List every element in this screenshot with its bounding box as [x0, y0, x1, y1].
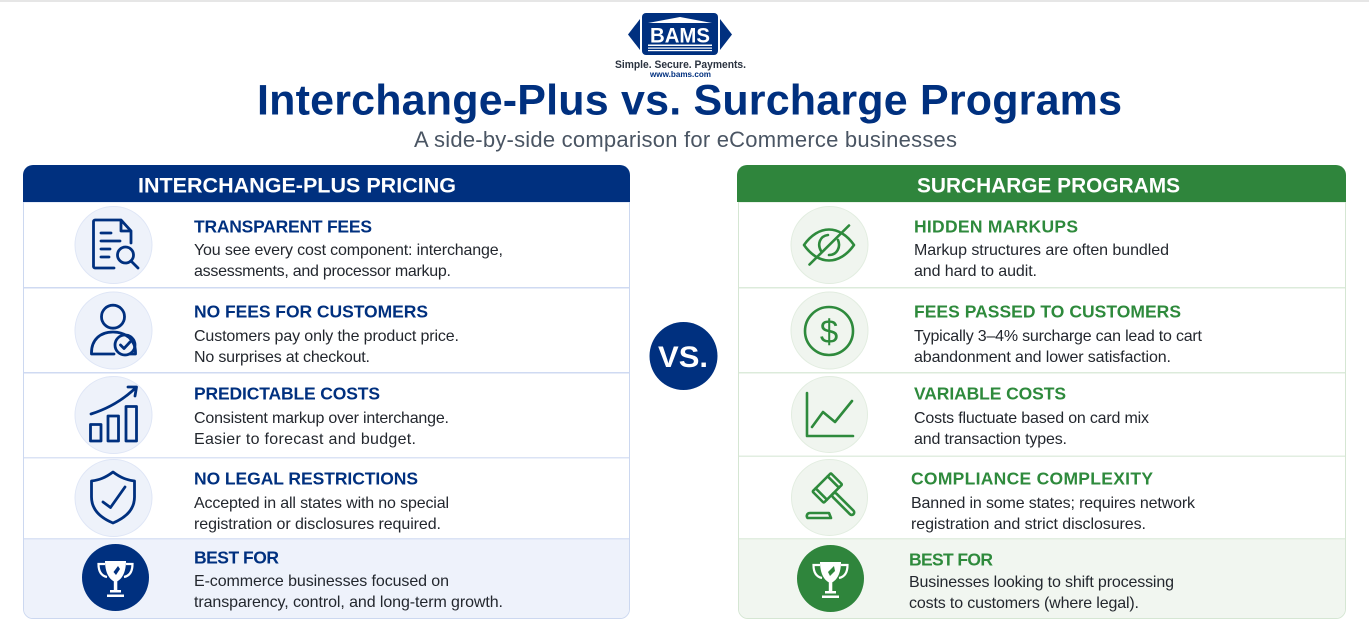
- icon: gavel: [792, 460, 868, 536]
- icon: trophy: [82, 544, 149, 611]
- text: fees passed to customers: [914, 328, 1203, 366]
- panel header: surcharge programs: [737, 165, 1346, 202]
- badge: VS: [650, 322, 718, 390]
- row: hidden markups: [791, 206, 1169, 284]
- heading: predictable costs: PREDICTABLE COSTS: [194, 384, 380, 404]
- panel header: interchange-plus pricing: INTERCHANGE-PLUS PRICING: [138, 174, 456, 198]
- row: best for: [82, 544, 503, 611]
- icon: dollar coin: $: [820, 313, 838, 350]
- row: transparent fees: [75, 206, 503, 284]
- heading: hidden markups: HIDDEN MARKUPS: [914, 216, 1078, 236]
- icon: customer with check: [75, 292, 152, 369]
- heading: no fees for customers: NO FEES FOR CUSTOMERS: [194, 302, 428, 322]
- text: no legal restrictions: [194, 495, 449, 533]
- logo: BAMS: Simple. Secure. Payments.: [615, 59, 746, 71]
- text: no fees for customers: Customers pay only the product price.: [194, 328, 459, 345]
- row: no fees for customers: [75, 292, 459, 369]
- text: transparent fees: [194, 242, 503, 280]
- icon: shield with check: [75, 460, 152, 536]
- text: no legal restrictions: registration or disclosures required.: [194, 516, 441, 533]
- heading: best for: BEST FOR: [909, 550, 993, 570]
- text: fees passed to customers: Typically 3–4% surcharge can lead to cart: [914, 328, 1203, 345]
- subtitle: A side-by-side comparison for eCommerce businesses: [414, 127, 957, 152]
- text: hidden markups: and hard to audit.: [914, 263, 1037, 280]
- badge: VS: VS.: [658, 341, 708, 374]
- heading: variable costs: VARIABLE COSTS: [914, 384, 1066, 404]
- text: compliance complexity: Banned in some states; requires network: [911, 495, 1196, 512]
- heading: no legal restrictions: NO LEGAL RESTRICTIONS: [194, 468, 418, 488]
- text: best for: transparency, control, and long-term growth.: [194, 594, 503, 611]
- text: predictable costs: [194, 410, 449, 448]
- icon: document with magnifier: [75, 206, 152, 284]
- text: best for: [909, 574, 1174, 612]
- text: best for: costs to customers (where legal).: [909, 595, 1139, 612]
- text: no legal restrictions: Accepted in all states with no special: [194, 495, 449, 512]
- row: fees passed to customers: [791, 292, 1203, 369]
- title: Interchange-Plus vs. Surcharge Programs: [257, 76, 1122, 124]
- text: variable costs: Costs fluctuate based on card mix: [914, 410, 1149, 427]
- row: predictable costs: [75, 376, 449, 454]
- text: compliance complexity: registration and strict disclosures.: [911, 516, 1146, 533]
- icon: growth chart: [75, 376, 152, 454]
- logo: BAMS: BAMS: [650, 24, 710, 48]
- text: fees passed to customers: abandonment and lower satisfaction.: [914, 349, 1171, 366]
- panel header: interchange-plus pricing: [23, 165, 630, 202]
- row: variable costs: [792, 376, 1149, 452]
- icon: crossed-out eye: [791, 206, 868, 284]
- text: transparent fees: You see every cost component: interchange,: [194, 242, 503, 259]
- text: hidden markups: Markup structures are often bundled: [914, 242, 1169, 259]
- row: best for: [797, 545, 1174, 612]
- text: hidden markups: [914, 242, 1169, 280]
- icon: line chart: [792, 376, 868, 452]
- panel: interchange-plus pricing: [23, 165, 630, 618]
- text: best for: Businesses looking to shift processing: [909, 574, 1174, 591]
- heading: best for: BEST FOR: [194, 548, 279, 568]
- text: variable costs: [914, 410, 1149, 448]
- text: compliance complexity: [911, 495, 1196, 533]
- panel: surcharge programs: [737, 165, 1346, 618]
- icon: dollar coin: [791, 292, 868, 369]
- text: transparent fees: assessments, and processor markup.: [194, 263, 451, 280]
- text: best for: E-commerce businesses focused on: [194, 573, 449, 590]
- row: compliance complexity: [792, 460, 1196, 536]
- logo: BAMS: [615, 13, 746, 79]
- text: best for: [194, 573, 503, 611]
- text: variable costs: and transaction types.: [914, 431, 1067, 448]
- logo: BAMS: www.bams.com: [649, 69, 711, 79]
- heading: transparent fees: TRANSPARENT FEES: [194, 216, 372, 236]
- panel header: surcharge programs: SURCHARGE PROGRAMS: [917, 174, 1180, 198]
- icon: trophy: [797, 545, 864, 612]
- text: no fees for customers: No surprises at checkout.: [194, 349, 370, 366]
- row: no legal restrictions: [75, 460, 449, 536]
- text: predictable costs: Consistent markup over interchange.: [194, 410, 449, 427]
- heading: compliance complexity: COMPLIANCE COMPLEXITY: [911, 468, 1153, 488]
- text: no fees for customers: [194, 328, 459, 366]
- heading: fees passed to customers: FEES PASSED TO CUSTOMERS: [914, 302, 1181, 322]
- text: predictable costs: Easier to forecast and budget.: [194, 431, 416, 448]
